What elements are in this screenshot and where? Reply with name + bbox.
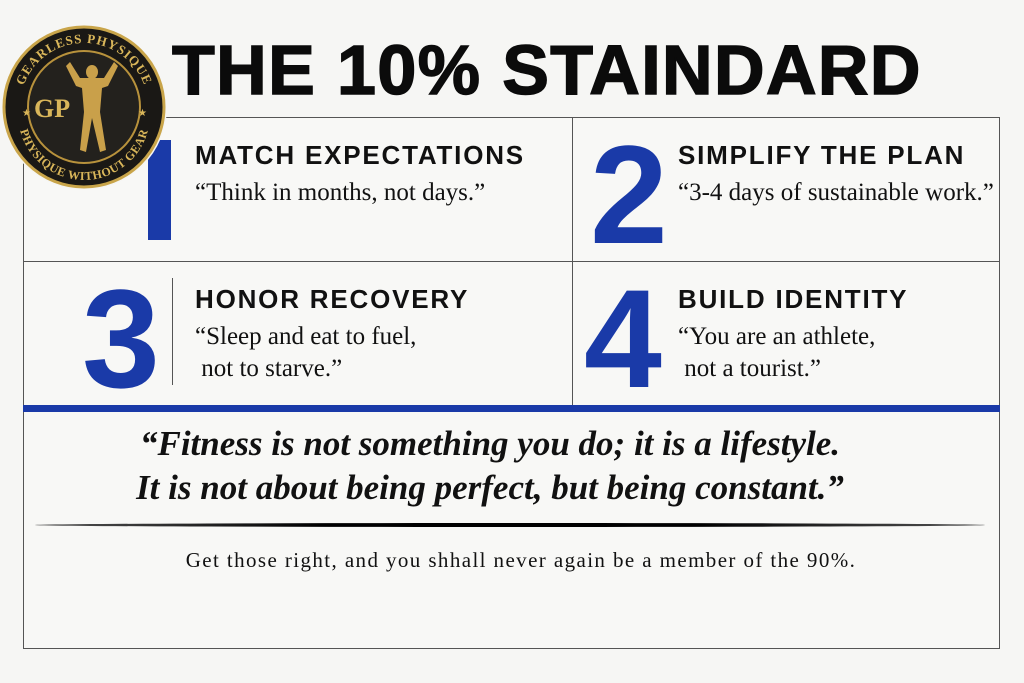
quote 3: not to starve.” xyxy=(201,355,342,382)
number 2: 2 xyxy=(590,116,668,273)
quote 3 xyxy=(195,323,416,382)
heading 2: SIMPLIFY THE PLAN xyxy=(678,140,965,170)
black rule xyxy=(35,523,985,527)
quote 4: not a tourist.” xyxy=(684,355,821,382)
quote 2: “3-4 days of sustainable work.” xyxy=(678,179,994,206)
item 1 xyxy=(148,140,525,240)
number 1 xyxy=(148,140,171,240)
number 3: 3 xyxy=(82,260,160,417)
quote 3: “Sleep and eat to fuel, xyxy=(195,323,416,350)
heading 4: BUILD IDENTITY xyxy=(678,284,908,314)
item 2 xyxy=(590,116,994,273)
number 4: 4 xyxy=(584,260,662,417)
logo badge xyxy=(2,26,166,188)
main quote: “Fitness is not something you do; it is a lifestyle. xyxy=(140,424,840,463)
grid lines xyxy=(572,117,573,407)
heading 3: HONOR RECOVERY xyxy=(195,284,469,314)
heading 1: MATCH EXPECTATIONS xyxy=(195,140,525,170)
main frame xyxy=(23,117,1000,649)
quote 1: “Think in months, not days.” xyxy=(195,179,485,206)
logo badge: GP xyxy=(34,94,70,123)
item 4 xyxy=(584,260,908,417)
footer text: Get those right, and you shhall never again be a member of the 90%. xyxy=(186,548,856,572)
main quote: It is not about being perfect, but being constant.” xyxy=(136,468,844,507)
logo badge: ★ xyxy=(22,108,31,119)
main quote xyxy=(136,424,844,507)
logo badge: PHYSIQUE WITHOUT GEAR xyxy=(20,128,148,180)
item 3 xyxy=(82,260,469,417)
logo badge: ★ xyxy=(138,108,147,119)
blue divider bar xyxy=(23,405,1000,412)
logo badge: GEARLESS PHYSIQUE xyxy=(17,34,152,84)
quote 4: “You are an athlete, xyxy=(678,323,875,350)
quote 4 xyxy=(678,323,875,382)
title: THE 10% STAINDARD xyxy=(172,31,922,109)
